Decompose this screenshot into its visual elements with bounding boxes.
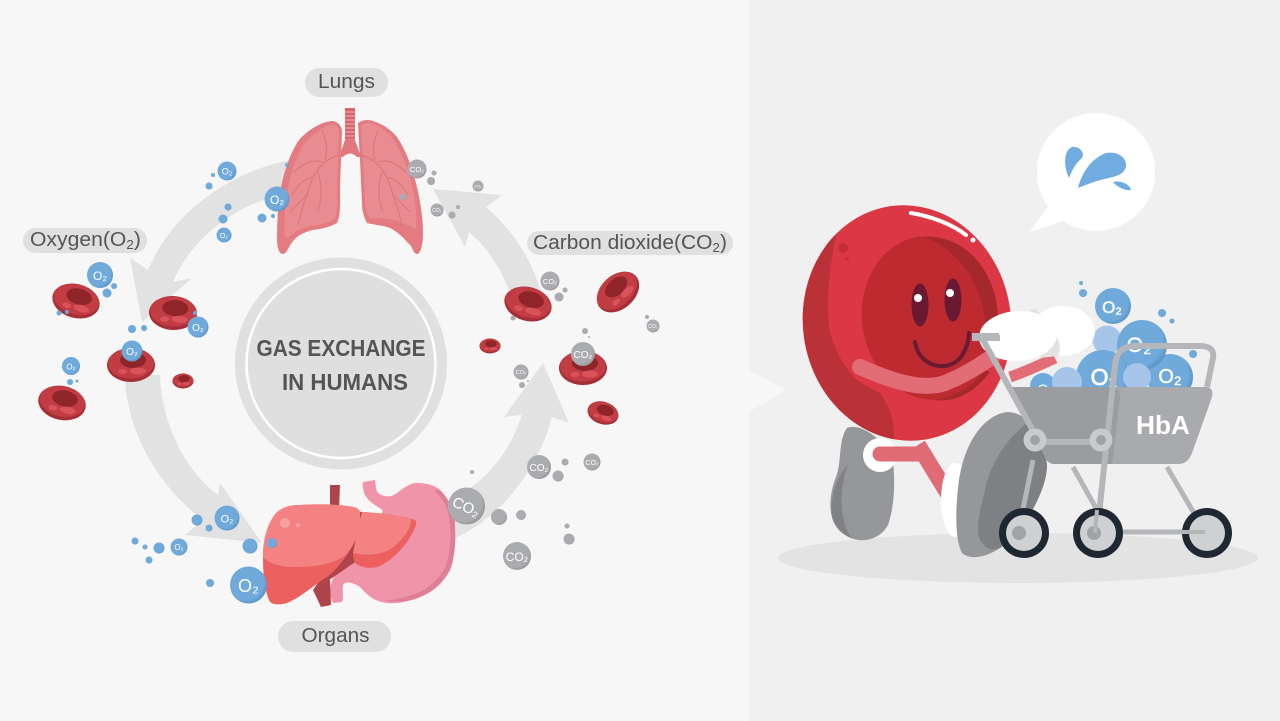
oxygen bubbles in cart: O₂	[1102, 298, 1122, 317]
cart rear frame	[1018, 460, 1205, 534]
center circle title	[235, 258, 447, 470]
ground shadow	[778, 533, 1258, 583]
oxygen bubbles in cart	[1030, 281, 1197, 404]
carbon dioxide bubbles: CO₂	[574, 350, 593, 361]
highlights	[911, 213, 966, 235]
label: Oxygen: Oxygen(O	[30, 229, 121, 251]
carbon dioxide bubbles: CO₂	[410, 165, 424, 174]
oxygen bubbles in cart: O₂	[1091, 364, 1117, 390]
label: Organs	[278, 621, 391, 652]
oxygen bubbles: O₂	[270, 193, 284, 207]
carbon dioxide bubbles: CO₂	[585, 460, 599, 467]
smile	[915, 333, 969, 366]
cart basket	[1010, 387, 1212, 464]
arms	[860, 357, 992, 386]
oxygen bubbles: O₂	[220, 233, 228, 240]
oxygen bubbles in cart: O	[1038, 381, 1049, 397]
arrow: oxygen to organs	[125, 375, 262, 543]
label: Carbon dioxide: )	[720, 232, 727, 254]
label: Oxygen	[23, 228, 147, 253]
right background panel	[749, 0, 1280, 721]
oxygen bubbles: O₂	[126, 347, 138, 358]
character: red blood cell pushing cart	[788, 192, 1055, 557]
arrow: lungs to oxygen	[130, 160, 292, 322]
oxygen bubbles: O₂	[221, 514, 233, 526]
shopping cart	[972, 333, 1232, 558]
carbon dioxide bubbles: CO₂	[543, 277, 557, 286]
oxygen bubbles: O₂	[222, 166, 233, 176]
label: Lungs	[305, 68, 388, 97]
speech bubble with drops	[1030, 113, 1155, 232]
icon: stomach	[330, 480, 455, 603]
red blood cells: oxygen side	[35, 278, 198, 425]
oxygen bubbles: O₂	[93, 269, 107, 283]
oxygen bubbles: O₂	[174, 543, 184, 552]
icon: vessel	[313, 485, 340, 607]
front shoe	[941, 412, 1047, 557]
cart joints	[1024, 428, 1112, 452]
icon: liver	[263, 504, 416, 604]
carbon dioxide bubbles: CO₂	[516, 370, 526, 376]
red blood cells: carbon dioxide side	[479, 263, 647, 429]
oxygen bubbles in cart: O₂	[1158, 366, 1182, 388]
icon: water drops	[1065, 147, 1131, 190]
oxygen bubbles: O₂	[192, 323, 204, 334]
left background panel	[0, 0, 749, 721]
cart wheels	[999, 508, 1232, 558]
oxygen bubbles in cart: O₂	[1127, 334, 1151, 357]
label: Organs: Organs	[302, 625, 370, 647]
label: Carbon dioxide: Carbon dioxide(CO	[533, 232, 704, 254]
oxygen bubbles: O₂	[66, 362, 76, 372]
label: Oxygen: 2	[126, 237, 134, 252]
oxygen bubbles: O₂	[238, 576, 259, 596]
cart handles	[1097, 346, 1213, 533]
title text: GAS EXCHANGE	[256, 335, 426, 361]
white gloves	[978, 306, 1095, 363]
arrow: organs to carbon dioxide	[450, 363, 569, 540]
label: Lungs: Lungs	[318, 71, 375, 93]
label: Oxygen: )	[134, 229, 141, 251]
carbon dioxide bubbles: CO₂	[474, 184, 482, 188]
body shadow	[802, 234, 894, 440]
carbon dioxide bubbles: CO₂	[449, 494, 482, 521]
center circle title: IN HUMANS	[282, 369, 408, 395]
carbon dioxide bubbles	[400, 160, 660, 570]
carbon dioxide bubbles: CO₂	[530, 463, 549, 474]
cycle arrows	[125, 160, 569, 543]
back leg and shoe	[830, 427, 950, 540]
arrow: carbon dioxide to lungs	[433, 189, 543, 300]
cart label: HbA	[1136, 410, 1190, 440]
carbon dioxide bubbles: CO₂	[506, 550, 529, 564]
oxygen bubbles	[56, 162, 290, 604]
eyes	[912, 278, 962, 326]
carbon dioxide bubbles: CO₂	[648, 324, 658, 330]
icon: lungs	[277, 108, 423, 254]
inner cell face area	[851, 227, 1009, 409]
panel pointer arrow	[749, 370, 786, 412]
label: Carbon dioxide: 2	[712, 240, 720, 255]
carbon dioxide bubbles: CO₂	[432, 208, 442, 214]
body	[788, 192, 1026, 454]
